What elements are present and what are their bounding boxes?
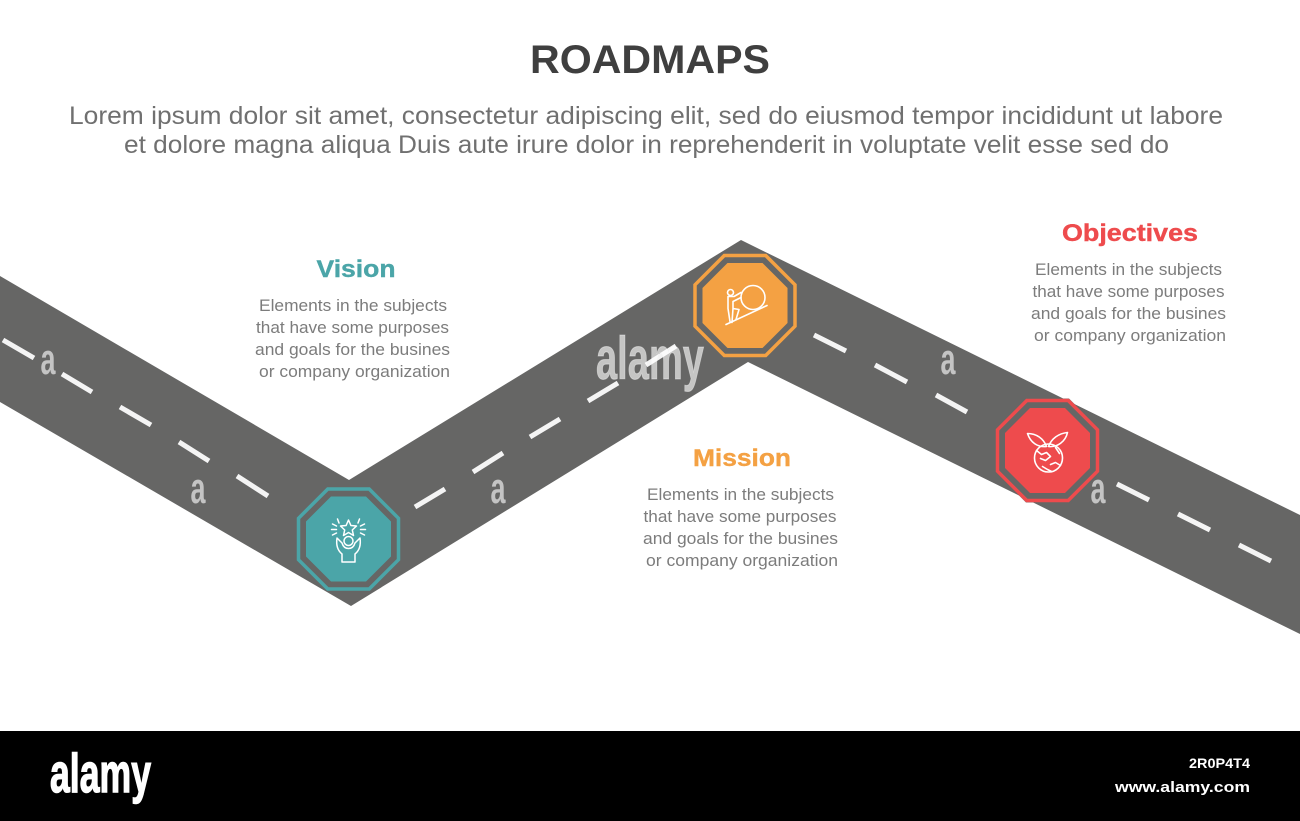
watermark letters on road: a: [190, 464, 206, 513]
mission body text: [643, 485, 838, 570]
label: objectives: [1031, 220, 1226, 345]
vision body text: [255, 296, 450, 381]
zigzag road: [0, 240, 1300, 634]
marker: vision octagon: [296, 487, 400, 591]
mission body text: and goals for the busines: [643, 529, 838, 548]
watermark letters on road: a: [1090, 464, 1106, 513]
watermark letters on road: a: [40, 335, 56, 384]
image id: 2R0P4T4: [1189, 755, 1250, 771]
footer bar: [0, 731, 1300, 821]
mission body text: or company organization: [646, 551, 838, 570]
label: vision: [255, 256, 450, 381]
objectives body text: Elements in the subjects: [1035, 260, 1222, 279]
icon: globe with leaves: [1028, 432, 1068, 472]
subtitle text block: [69, 102, 1223, 159]
marker: objectives octagon: [996, 398, 1100, 502]
icon: figure pushing boulder: [726, 286, 767, 324]
watermark letters on road: a: [490, 464, 506, 513]
mission heading: Mission: [693, 445, 791, 472]
title: ROADMAPS: [530, 38, 770, 82]
watermark centre: alamy: [596, 325, 704, 392]
marker: mission octagon: [693, 254, 797, 358]
objectives body text: and goals for the busines: [1031, 304, 1226, 323]
objectives heading: Objectives: [1062, 220, 1198, 247]
subtitle text block: et dolore magna aliqua Duis aute irure dolor in reprehenderit in voluptate velit esse sed do: [124, 131, 1169, 159]
vision body text: or company organization: [259, 362, 450, 381]
vision body text: Elements in the subjects: [259, 296, 447, 315]
objectives body text: [1031, 260, 1226, 345]
mission body text: that have some purposes: [644, 507, 836, 526]
vision heading: Vision: [316, 256, 396, 283]
label: mission: [643, 445, 838, 570]
watermark letters on road: [40, 335, 1106, 513]
footer url: www.alamy.com: [1114, 779, 1250, 796]
objectives body text: or company organization: [1034, 326, 1226, 345]
icon: person raising star: [332, 519, 366, 562]
watermark letters on road: a: [940, 335, 956, 384]
vision body text: and goals for the busines: [255, 340, 450, 359]
footer logo: alamy: [50, 742, 151, 804]
subtitle text block: Lorem ipsum dolor sit amet, consectetur adipiscing elit, sed do eiusmod tempor incididunt ut labore: [69, 102, 1223, 130]
objectives body text: that have some purposes: [1032, 282, 1224, 301]
vision body text: that have some purposes: [256, 318, 449, 337]
road centre dashes: [3, 335, 1271, 561]
mission body text: Elements in the subjects: [647, 485, 834, 504]
